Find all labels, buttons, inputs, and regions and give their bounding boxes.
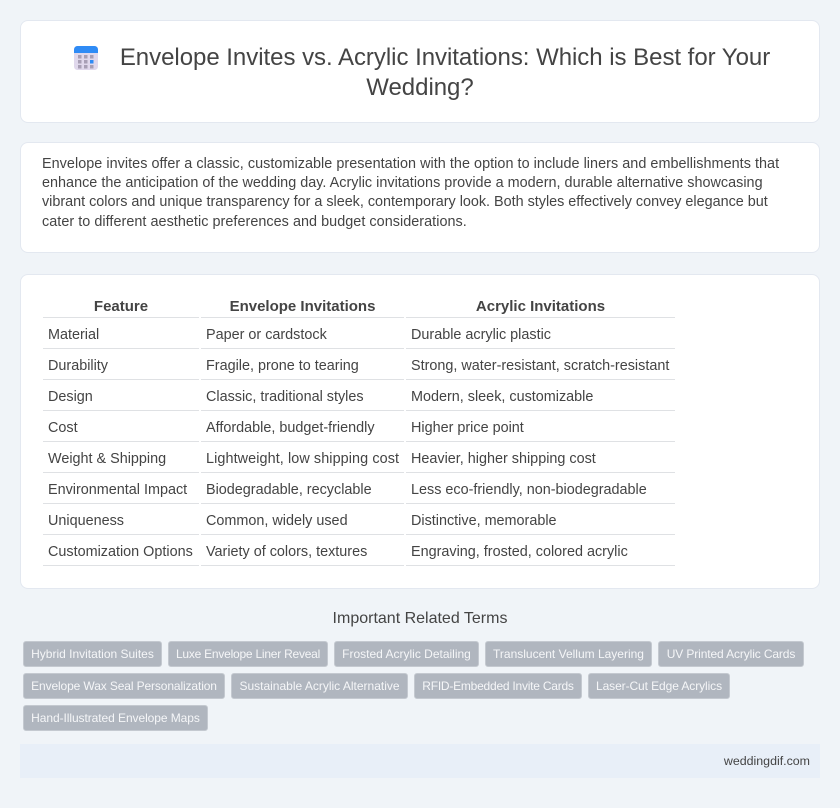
title: Envelope Invites vs. Acrylic Invitations: Which is Best for Your	[120, 44, 770, 71]
related terms tags: Laser-Cut Edge Acrylics	[596, 679, 722, 693]
comparison table: Heavier, higher shipping cost	[411, 451, 596, 467]
footer text: weddingdif.com	[724, 754, 810, 768]
icon: calendar	[74, 46, 98, 70]
title: Wedding?	[366, 74, 474, 101]
comparison table: Durable acrylic plastic	[411, 327, 551, 343]
footer bar	[20, 744, 820, 778]
comparison table: Feature	[94, 298, 148, 315]
comparison table: Classic, traditional styles	[206, 389, 364, 405]
related terms heading: Important Related Terms	[333, 610, 507, 627]
comparison panel	[20, 274, 820, 589]
comparison table: Weight & Shipping	[48, 451, 166, 467]
comparison table: Cost	[48, 420, 78, 436]
comparison table: Distinctive, memorable	[411, 513, 557, 529]
title	[120, 44, 770, 101]
comparison table: Biodegradable, recyclable	[206, 482, 372, 498]
intro text: vibrant colors and unique transparency for a sleek, contemporary look. Both styles effectively convey elegance but	[42, 194, 768, 210]
comparison table: Envelope Invitations	[230, 298, 375, 315]
related terms tags: Frosted Acrylic Detailing	[342, 647, 471, 661]
related terms tags: Translucent Vellum Layering	[493, 647, 644, 661]
comparison table: Uniqueness	[48, 513, 124, 529]
comparison table: Design	[48, 389, 93, 405]
comparison table: Engraving, frosted, colored acrylic	[411, 544, 628, 560]
comparison table: Common, widely used	[206, 513, 348, 529]
comparison table	[43, 298, 675, 566]
related terms tags: Hand-Illustrated Envelope Maps	[31, 711, 200, 725]
comparison table: Durability	[48, 358, 108, 374]
comparison table: Strong, water-resistant, scratch-resistant	[411, 358, 669, 374]
comparison table: Modern, sleek, customizable	[411, 389, 593, 405]
comparison table: Material	[48, 327, 99, 343]
comparison table: Customization Options	[48, 544, 193, 560]
related terms tags: Envelope Wax Seal Personalization	[31, 679, 217, 693]
comparison table: Lightweight, low shipping cost	[206, 451, 399, 467]
comparison table: Variety of colors, textures	[206, 544, 367, 560]
intro text: Envelope invites offer a classic, customizable presentation with the option to include liners and embellishments that	[42, 156, 779, 172]
comparison table: Less eco-friendly, non-biodegradable	[411, 482, 647, 498]
related terms tags: Luxe Envelope Liner Reveal	[176, 647, 320, 661]
intro text: enhance the anticipation of the wedding day. Acrylic invitations provide a modern, durable alternative showcasing	[42, 175, 763, 191]
related terms tags: RFID-Embedded Invite Cards	[422, 679, 574, 693]
intro panel	[20, 142, 820, 253]
intro text: cater to different aesthetic preferences and budget considerations.	[42, 214, 467, 230]
related terms tags: UV Printed Acrylic Cards	[667, 647, 795, 661]
comparison table: Acrylic Invitations	[476, 298, 605, 315]
comparison table: Higher price point	[411, 420, 524, 436]
comparison table: Environmental Impact	[48, 482, 187, 498]
comparison table: Affordable, budget-friendly	[206, 420, 375, 436]
comparison table: Fragile, prone to tearing	[206, 358, 359, 374]
header card	[20, 20, 820, 123]
related terms tags: Sustainable Acrylic Alternative	[239, 679, 400, 693]
intro text	[42, 156, 780, 230]
comparison table: Paper or cardstock	[206, 327, 327, 343]
related terms tags: Hybrid Invitation Suites	[31, 647, 154, 661]
